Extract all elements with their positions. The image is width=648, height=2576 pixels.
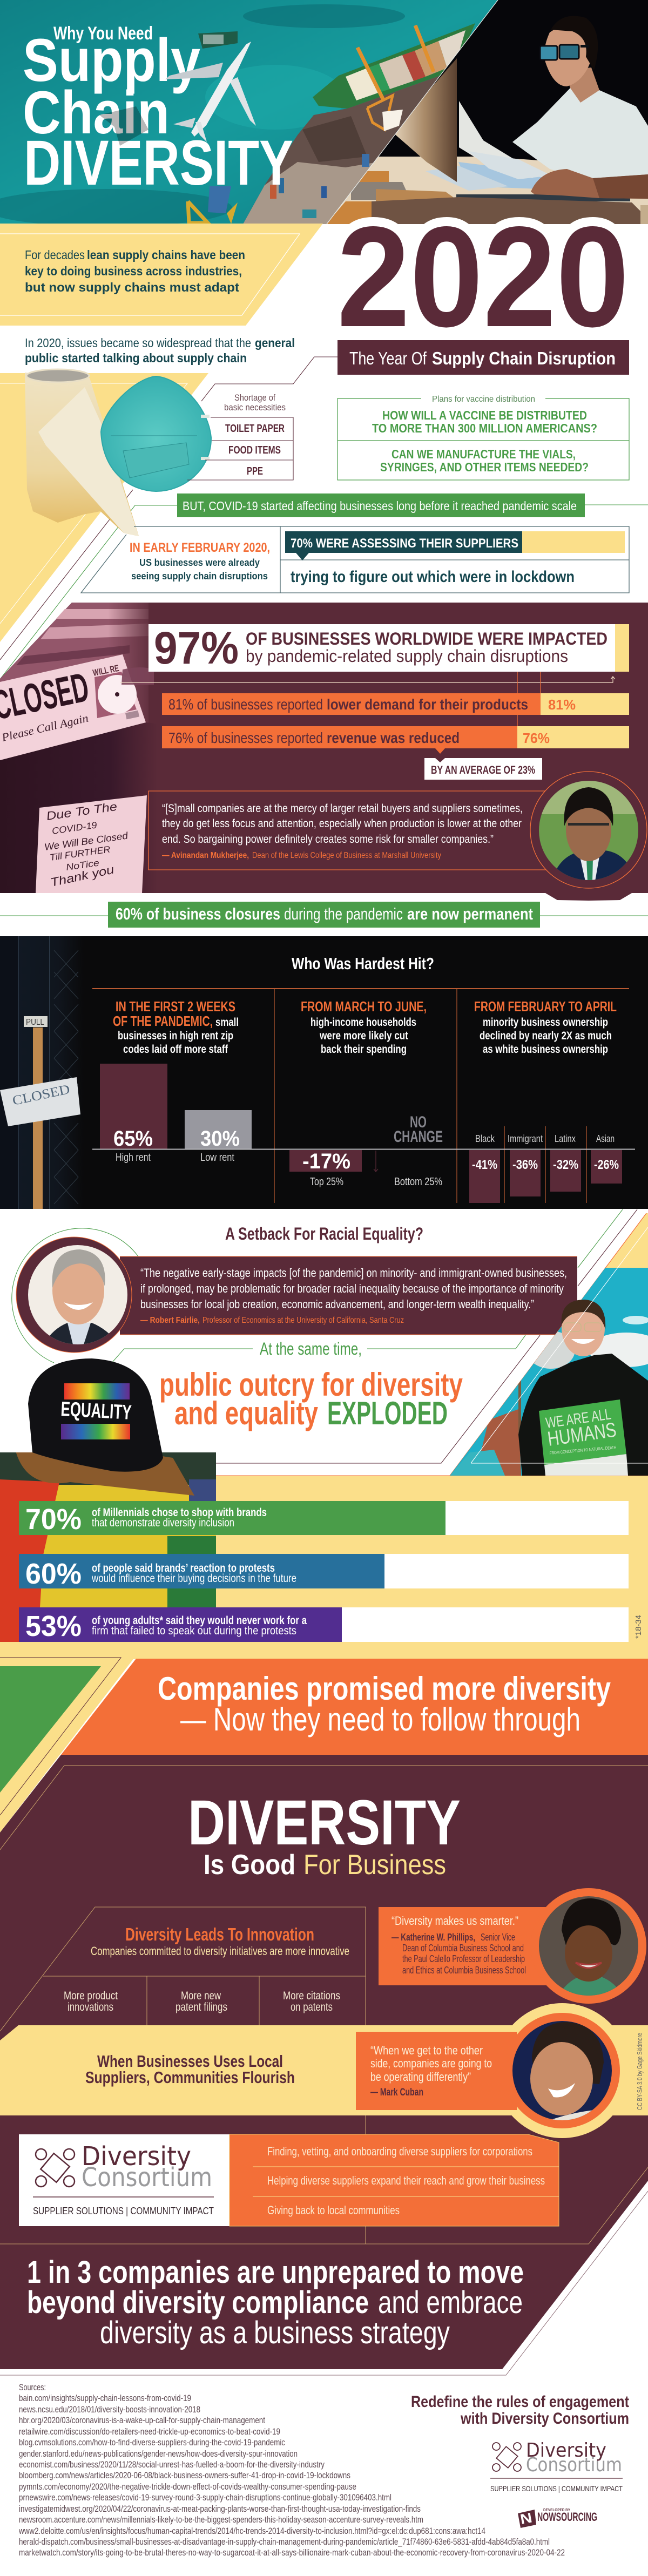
average callout: BY AN AVERAGE OF 23%	[431, 764, 535, 776]
innovation table: Diversity Leads To Innovation	[125, 1924, 314, 1944]
sign board	[0, 654, 146, 760]
quote: Cuban: — Mark Cuban	[370, 2087, 423, 2098]
stat bar: 70 percent: of Millennials chose to shop with brands	[92, 1506, 267, 1519]
quote: Mukherjee: they do get less focus and attention, especially when production is lower at the other	[162, 817, 522, 830]
bar: revenue reduced: 76%	[523, 730, 550, 746]
column: rent: Low rent	[200, 1152, 234, 1164]
sources: pymnts.com/economy/2020/the-negative-trickle-down-effect-of-covids-wealthy-consumer-spending-pause	[19, 2482, 356, 2492]
quote: Phillips: the Paul Calello Professor of Leadership	[402, 1953, 525, 1964]
quote: Phillips: Dean of Columbia Business School and	[402, 1943, 524, 1953]
innovation table	[0, 1907, 366, 2031]
quote: Mukherjee: Dean of the Lewis College of Business at Marshall University	[252, 851, 441, 860]
logo	[33, 2141, 214, 2216]
year of disruption banner	[338, 340, 629, 375]
handwritten note: NoTice	[65, 858, 100, 873]
70 percent bar: 70% WERE ASSESSING THEIR SUPPLIERS	[291, 536, 518, 551]
lower left green triangle	[0, 1658, 134, 1833]
quote: Phillips	[379, 1907, 557, 1985]
column: spending: high-income households	[310, 1016, 416, 1029]
at the same time: At the same time,	[260, 1339, 362, 1358]
intro text: lean supply chains have been	[87, 248, 245, 262]
shortage list: TOILET PAPER	[225, 423, 285, 435]
column: rent: businesses in high rent zip	[118, 1030, 233, 1042]
vaccine distribution box: HOW WILL A VACCINE BE DISTRIBUTED	[382, 408, 587, 422]
footer logo: Diversity Consortium: Diversity	[526, 2439, 606, 2462]
column: spending	[289, 998, 443, 1188]
innovation table: innovations	[68, 2001, 113, 2013]
97 percent box	[148, 623, 629, 673]
yellow local suppliers band: Suppliers, Communities Flourish	[85, 2068, 295, 2087]
column: ownership: declined by nearly 2X as much	[480, 1030, 612, 1042]
innovation table: More citations	[283, 1990, 340, 2002]
handwritten note: We Will Be Closed	[44, 830, 129, 853]
heading	[188, 1787, 461, 1881]
handwritten note: Due To The	[45, 800, 118, 823]
unprepared statement	[27, 2255, 524, 2350]
right-side diagonal lines	[578, 1209, 637, 1286]
heading: racial equality: A Setback For Racial Equality?	[225, 1224, 423, 1243]
quote: Fairlie: if prolonged, may be problematic for broader racial inequality because of the importance of minority	[140, 1282, 564, 1295]
column: spending: Top 25%	[310, 1176, 343, 1188]
intro text: but now supply chains must adapt	[25, 280, 239, 294]
yellow intro band	[0, 224, 323, 326]
column: spending: Bottom 25%	[394, 1176, 442, 1188]
green closures banner: during the pandemic	[284, 904, 403, 923]
stat bar: 53 percent	[19, 1607, 629, 1642]
vaccine distribution box: Plans for vaccine distribution	[432, 395, 535, 404]
quote: Fairlie: — Robert Fairlie,	[140, 1316, 200, 1325]
handwritten note: COVID-19	[51, 820, 98, 836]
stat bar: 53 percent: firm that failed to speak out during the protests	[92, 1625, 296, 1637]
early february box	[81, 526, 629, 593]
year of disruption banner: The Year Of	[349, 348, 427, 368]
unprepared statement: beyond diversity compliance	[27, 2285, 369, 2320]
yellow stats panel	[0, 1358, 648, 1659]
yellow local suppliers band	[0, 2025, 648, 2115]
public outcry headline: and equality	[174, 1395, 318, 1431]
quote: Phillips: “Diversity makes us smarter.”	[392, 1914, 518, 1928]
vaccine distribution box: TO MORE THAN 300 MILLION AMERICANS?	[372, 421, 597, 435]
unprepared statement: and embrace	[378, 2285, 523, 2320]
innovation table: Companies committed to diversity initiatives are more innovative	[91, 1944, 349, 1958]
widespread text: public started talking about supply chain	[25, 351, 247, 365]
services list: Giving back to local communities	[267, 2203, 400, 2217]
quote: Fairlie: “The negative early-stage impacts [of the pandemic] on minority- and immigrant-owned businesses,	[140, 1266, 567, 1280]
column: ownership: minority business ownership	[483, 1016, 608, 1029]
unprepared statement: diversity as a business strategy	[100, 2315, 450, 2350]
quote: Cuban: be operating differently”	[370, 2070, 471, 2084]
photo: closed sign: WILL RE	[92, 663, 120, 678]
sources: news.ncsu.edu/2018/01/diversity-boosts-innovation-2018	[19, 2404, 200, 2415]
icon: paper towel roll	[25, 369, 139, 536]
photo: sky and street behind person	[443, 1268, 648, 1476]
sign	[539, 1399, 628, 1476]
column: ownership: as white business ownership	[483, 1043, 608, 1056]
stat bar: 70 percent: 70%	[25, 1503, 82, 1536]
column: spending: NO	[410, 1113, 427, 1131]
innovation table: patent filings	[176, 2001, 227, 2013]
column: rent	[100, 998, 252, 1164]
portrait: Cuban	[512, 2021, 612, 2122]
quote: Mukherjee: — Avinandan Mukherjee,	[162, 851, 249, 860]
column: spending: back their spending	[321, 1043, 407, 1056]
photo: door with closed sign: CLOSED	[11, 1082, 71, 1108]
97 percent box: by pandemic-related supply chain disruptions	[246, 646, 568, 666]
vaccine distribution box: SYRINGES, AND OTHER ITEMS NEEDED?	[380, 460, 589, 474]
orange promise banner	[61, 1659, 648, 1755]
column: rent: IN THE FIRST 2 WEEKS	[116, 998, 235, 1015]
sources: retailwire.com/discussion/do-retailers-need-trickle-up-economics-to-beat-covid-19	[19, 2426, 280, 2437]
green closures banner	[0, 902, 648, 928]
vaccine distribution box	[338, 395, 629, 480]
vaccine distribution box: CAN WE MANUFACTURE THE VIALS,	[392, 447, 576, 461]
quote: Cuban: side, companies are going to	[370, 2057, 492, 2070]
yellow diagonal panel	[0, 373, 208, 642]
yellow corner triangle and sky photo	[443, 1213, 648, 1476]
sign: WE ARE ALL	[545, 1405, 612, 1431]
widespread text	[25, 336, 295, 365]
column: spending: were more likely cut	[319, 1030, 408, 1042]
sources: www2.deloitte.com/us/en/insights/focus/human-capital-trends/2014/hc-trends-2014-diversity-to-inclusion.html?id=gx:el:dc:dup681:cons:awa:hct14	[18, 2526, 485, 2536]
quote: Fairlie: Professor of Economics at the University of California, Santa Cruz	[202, 1316, 404, 1325]
footer logo: NowSourcing	[518, 2509, 597, 2528]
public outcry headline	[159, 1367, 463, 1431]
title: Chain	[23, 79, 170, 146]
column: ownership: Black	[475, 1133, 495, 1144]
shortage list: PPE	[247, 465, 263, 477]
stat bar: 70 percent: that demonstrate diversity inclusion	[92, 1517, 234, 1529]
quote: Fairlie	[120, 1256, 577, 1335]
sources: economist.com/business/2020/11/28/social-unrest-has-fuelled-a-boom-for-the-diversity-industry	[19, 2459, 325, 2470]
cap: EQUALITY	[60, 1398, 132, 1424]
column: rent: High rent	[116, 1152, 151, 1164]
column: rent: OF THE PANDEMIC,	[113, 1013, 213, 1029]
sources: investigatemidwest.org/2020/04/22/coronavirus-at-meat-packing-plants-worse-than-first-thought-usa-today-investigation-finds	[19, 2504, 421, 2514]
cap	[28, 1358, 163, 1472]
early february box: seeing supply chain disruptions	[131, 571, 268, 582]
quote: Cuban	[356, 2003, 630, 2138]
handwritten note	[44, 800, 129, 889]
at the same time	[108, 1335, 525, 1367]
heading: Is Good	[204, 1849, 295, 1881]
shortage list: FOOD ITEMS	[228, 444, 281, 456]
bar: lower demand: lower demand for their products	[327, 696, 528, 713]
container ship	[313, 23, 475, 109]
stat bar: 70 percent	[19, 1501, 629, 1536]
bar: revenue reduced	[162, 726, 629, 748]
97 percent box: 97%	[154, 623, 239, 673]
footer divider	[0, 2191, 648, 2375]
logo: SUPPLIER SOLUTIONS | COMMUNITY IMPACT	[33, 2206, 214, 2216]
small boat and crane	[188, 201, 208, 223]
green covid banner: BUT, COVID-19 started affecting businesses long before it reached pandemic scale	[183, 499, 577, 513]
sources: bloomberg.com/news/articles/2020-06-08/black-business-owners-suffer-41-drop-in-covid-19-lockdowns	[19, 2470, 350, 2480]
stat bar: 53 percent: 53%	[25, 1610, 82, 1642]
big year 2020: 2020	[337, 197, 629, 357]
column: ownership: -41%	[472, 1158, 497, 1172]
sources: newsroom.accenture.com/news/millennials-likely-to-be-the-biggest-spenders-this-holiday-season-accenture-survey-reveals.htm	[19, 2514, 423, 2525]
average callout	[424, 758, 542, 780]
footnote: *18-34	[634, 1615, 643, 1639]
monitor	[393, 58, 457, 182]
dark hardest hit panel: Who Was Hardest Hit?	[292, 954, 434, 973]
sources: prnewswire.com/news-releases/covid-19-survey-round-3-supply-chain-disruptions-continue-globally-301096403.html	[19, 2492, 392, 2503]
stat bar: 60 percent: of people said brands’ reaction to protests	[92, 1562, 275, 1574]
stat bar: 60 percent: would influence their buying decisions in the future	[91, 1572, 296, 1585]
sources: blog.cvmsolutions.com/how-to-find-diverse-suppliers-during-the-covid-19-pandemic	[19, 2437, 285, 2447]
early february box: trying to figure out which were in lockdown	[291, 568, 575, 586]
widespread text: In 2020, issues became so widespread that the	[25, 336, 251, 350]
maroon impact panel	[0, 603, 648, 901]
photo: closed sign: Please Call Again	[0, 712, 90, 744]
public outcry headline: public outcry for diversity	[159, 1367, 463, 1403]
services list: Finding, vetting, and onboarding diverse suppliers for corporations	[267, 2145, 532, 2158]
hero photo: container port seen from above	[0, 0, 498, 227]
column: ownership	[469, 998, 622, 1203]
quote: Phillips: and Ethics at Columbia Business School	[402, 1965, 526, 1976]
photo: rainbow flag and equality cap	[0, 1358, 216, 1642]
hero photo: woman at computer	[324, 0, 648, 224]
hero photo: plane and shadow	[99, 42, 256, 146]
column: rent: 65%	[113, 1127, 153, 1151]
stat bar: 60 percent	[19, 1554, 629, 1590]
unprepared statement: 1 in 3 companies are unprepared to move	[27, 2255, 524, 2290]
decorative arc around Fairlie	[12, 1228, 138, 1363]
column: ownership: Immigrant	[508, 1133, 543, 1144]
quote: Mukherjee	[148, 791, 548, 870]
intro text	[25, 248, 245, 294]
bar: lower demand	[162, 693, 629, 715]
photo credit: CC BY-SA 3.0 by Gage Skidmore	[636, 2033, 644, 2110]
yellow local suppliers band: When Businesses Uses Local	[97, 2052, 283, 2071]
column: rent: codes laid off more staff	[123, 1043, 228, 1056]
person with sign	[518, 1300, 648, 1476]
shortage list: basic necessities	[224, 402, 286, 413]
early february box: IN EARLY FEBRUARY 2020,	[130, 540, 270, 555]
dark hardest hit panel	[0, 936, 648, 1209]
sources: bain.com/insights/supply-chain-lessons-from-covid-19	[19, 2393, 191, 2403]
sign: FROM CONCEPTION TO NATURAL DEATH	[549, 1445, 617, 1456]
column: ownership: Asian	[596, 1133, 615, 1144]
sources: gender.stanford.edu/news-publications/gender-news/how-does-diversity-spur-innovation	[19, 2449, 298, 2459]
intro text: key to doing business across industries,	[25, 264, 242, 278]
green covid banner	[177, 493, 585, 517]
quote: Mukherjee: end. So bargaining power definitely creates some risk for smaller companies.”	[162, 833, 494, 846]
portrait: Phillips	[531, 1888, 646, 2004]
widespread text: general	[255, 336, 295, 350]
quote: Phillips: — Katherine W. Phillips,	[392, 1932, 475, 1943]
column: ownership: -26%	[594, 1158, 619, 1172]
handwritten note: Thank you	[49, 862, 115, 889]
quote: Fairlie: businesses for local job creation, economic advancement, and longer-term wealth inequality.”	[140, 1297, 534, 1311]
title: Supply	[23, 26, 200, 94]
bar: lower demand: 81%	[548, 697, 576, 713]
desk	[333, 157, 648, 216]
innovation table: More product	[64, 1990, 118, 2002]
green closures banner: 60% of business closures	[116, 904, 280, 923]
97 percent box: OF BUSINESSES WORLDWIDE WERE IMPACTED	[246, 629, 608, 648]
photo: closed sign	[0, 603, 158, 893]
bar: revenue reduced: revenue was reduced	[327, 729, 460, 746]
title	[23, 23, 293, 199]
column: spending: FROM MARCH TO JUNE,	[301, 998, 427, 1015]
services list: Helping diverse suppliers expand their reach and grow their business	[267, 2174, 545, 2187]
footer logo: NowSourcing: N	[519, 2510, 534, 2527]
footer logo: NowSourcing: NOWSOURCING	[537, 2510, 597, 2524]
public outcry headline: EXPLODED	[327, 1395, 448, 1431]
services list	[253, 2145, 559, 2217]
column: rent: 30%	[200, 1127, 240, 1151]
portrait: Fairlie	[16, 1237, 132, 1353]
footer logo: Diversity Consortium	[490, 2439, 623, 2493]
tug boat	[198, 31, 238, 49]
70 percent bar	[285, 531, 625, 560]
column: ownership: -36%	[512, 1158, 538, 1172]
hand and arm	[531, 169, 648, 199]
column: spending: -17%	[302, 1150, 350, 1173]
sources: hbr.org/2020/03/coronavirus-is-a-wake-up-call-for-supply-chain-management	[19, 2415, 265, 2425]
port dock	[243, 76, 440, 224]
footer logo: NowSourcing: DEVELOPED BY	[543, 2509, 570, 2512]
column: ownership: -32%	[553, 1158, 578, 1172]
column: ownership: Latinx	[555, 1133, 576, 1144]
photo: door with closed sign	[0, 936, 84, 1209]
footer logo: Diversity Consortium: Consortium	[526, 2454, 622, 2476]
shortage list: Shortage of	[234, 393, 275, 403]
heading: For Business	[303, 1849, 446, 1881]
stat bar: 53 percent: of young adults* said they would never work for a	[92, 1614, 307, 1627]
bar: revenue reduced: 76% of businesses reported	[168, 729, 323, 746]
neck and face	[569, 67, 599, 103]
column: spending: CHANGE	[394, 1128, 443, 1146]
column: rent: small	[215, 1016, 239, 1029]
intro text: For decades	[25, 248, 85, 262]
year of disruption banner: Supply Chain Disruption	[432, 348, 616, 368]
photo: door with closed sign: PULL	[26, 1018, 44, 1027]
sign: HUMANS	[546, 1419, 618, 1451]
portrait: Mukherjee	[530, 772, 647, 888]
handwritten note: Till FURTHER	[49, 844, 111, 863]
innovation table: on patents	[291, 2001, 333, 2013]
quote: Phillips: Senior Vice	[481, 1932, 515, 1943]
quote: Mukherjee: “[S]mall companies are at the mercy of larger retail buyers and suppliers sometimes,	[162, 802, 523, 815]
divider line	[165, 1335, 540, 1463]
icon: N95 mask	[101, 376, 211, 491]
Diversity Consortium card	[19, 2134, 559, 2226]
stat bar: 60 percent: 60%	[25, 1558, 82, 1590]
call to action	[411, 2393, 629, 2428]
arrow line	[120, 677, 615, 682]
title: Why You Need	[53, 23, 153, 44]
connector lines	[0, 357, 648, 679]
big year 2020: 2020	[337, 197, 629, 357]
green closures banner: are now permanent	[407, 904, 533, 923]
maroon diversity panel	[0, 1755, 648, 2369]
hero banner	[0, 0, 648, 227]
logo: Consortium	[82, 2162, 212, 2193]
sources	[18, 2382, 565, 2558]
shirt	[512, 88, 648, 182]
heading: DIVERSITY	[188, 1787, 461, 1858]
bar: lower demand: 81% of businesses reported	[168, 696, 323, 713]
paper note	[36, 795, 147, 893]
logo: Diversity	[82, 2141, 191, 2172]
shortage list	[187, 393, 293, 480]
papers	[459, 101, 551, 178]
sources: Sources:	[19, 2382, 46, 2392]
title: DIVERSITY	[24, 127, 293, 199]
innovation table: More new	[181, 1990, 221, 2002]
early february box: US businesses were already	[139, 557, 260, 568]
quote: Cuban: “When we get to the other	[370, 2044, 483, 2057]
